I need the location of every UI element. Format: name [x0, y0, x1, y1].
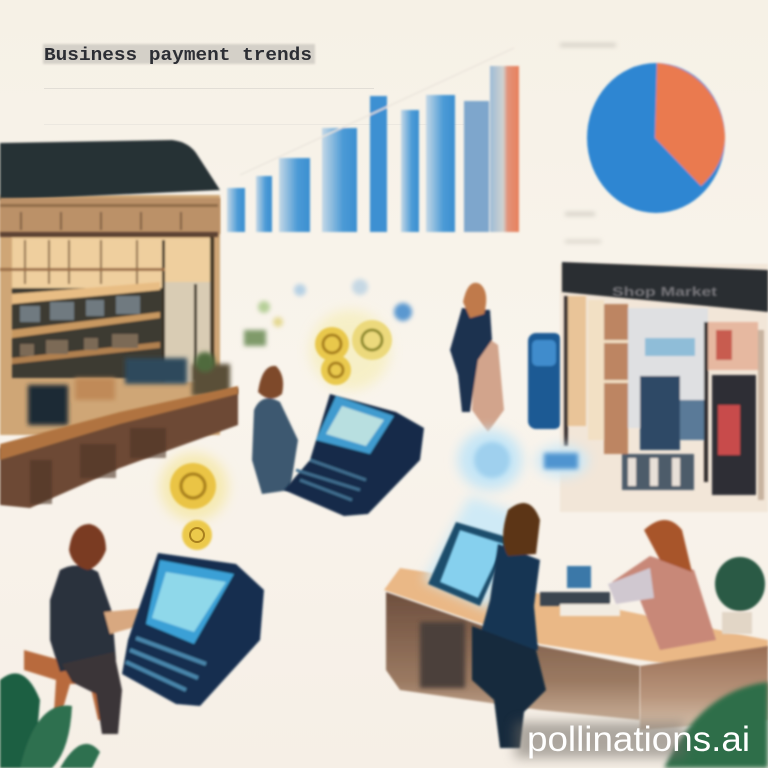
middle terminal and person: [252, 366, 424, 516]
shop sign text: Shop Market: [612, 284, 718, 299]
shop counter: [0, 388, 238, 508]
counter front: [386, 592, 640, 720]
storefront left: [0, 140, 238, 508]
blue water cooler: [528, 333, 562, 429]
body: [50, 565, 116, 672]
person at counter back view: [472, 503, 546, 748]
watermark: pollinations.ai: [527, 719, 750, 759]
shop window contents: [564, 296, 764, 500]
plant bottom right: [664, 682, 768, 768]
central person standing: [450, 283, 504, 432]
tablet on counter: [424, 496, 524, 610]
plant right: [715, 557, 765, 634]
chart title text: Business payment trends: [44, 46, 312, 66]
shop roof: [0, 140, 220, 200]
storefront right: [560, 262, 768, 512]
coins left: [160, 453, 228, 550]
floating coins centre: [310, 310, 392, 390]
bar chart: [227, 48, 519, 232]
blue glow payment icons: [458, 430, 588, 490]
watermark backdrop: [515, 722, 685, 758]
arm: [104, 608, 148, 634]
terminal middle: [284, 394, 424, 516]
counter items: [540, 566, 620, 616]
small floating icons: [244, 279, 412, 346]
person seated middle: [252, 366, 298, 494]
shop signboard band: [0, 198, 220, 234]
counter bottom right: [384, 566, 768, 730]
shop windows: [0, 232, 218, 385]
pie legend text: [560, 43, 616, 243]
foreground person left: [24, 524, 148, 734]
shop frame: [560, 264, 768, 512]
chart title text: [43, 44, 464, 125]
counter top: [384, 568, 768, 664]
shop interior items: [28, 352, 230, 425]
shop sign: [562, 262, 768, 312]
head: [69, 524, 106, 570]
chair: [24, 650, 108, 720]
shop wall: [0, 195, 220, 435]
pie chart: [587, 63, 725, 213]
person at counter right: [608, 520, 716, 650]
plant bottom left: [0, 673, 100, 768]
foreground terminal: [122, 553, 264, 706]
